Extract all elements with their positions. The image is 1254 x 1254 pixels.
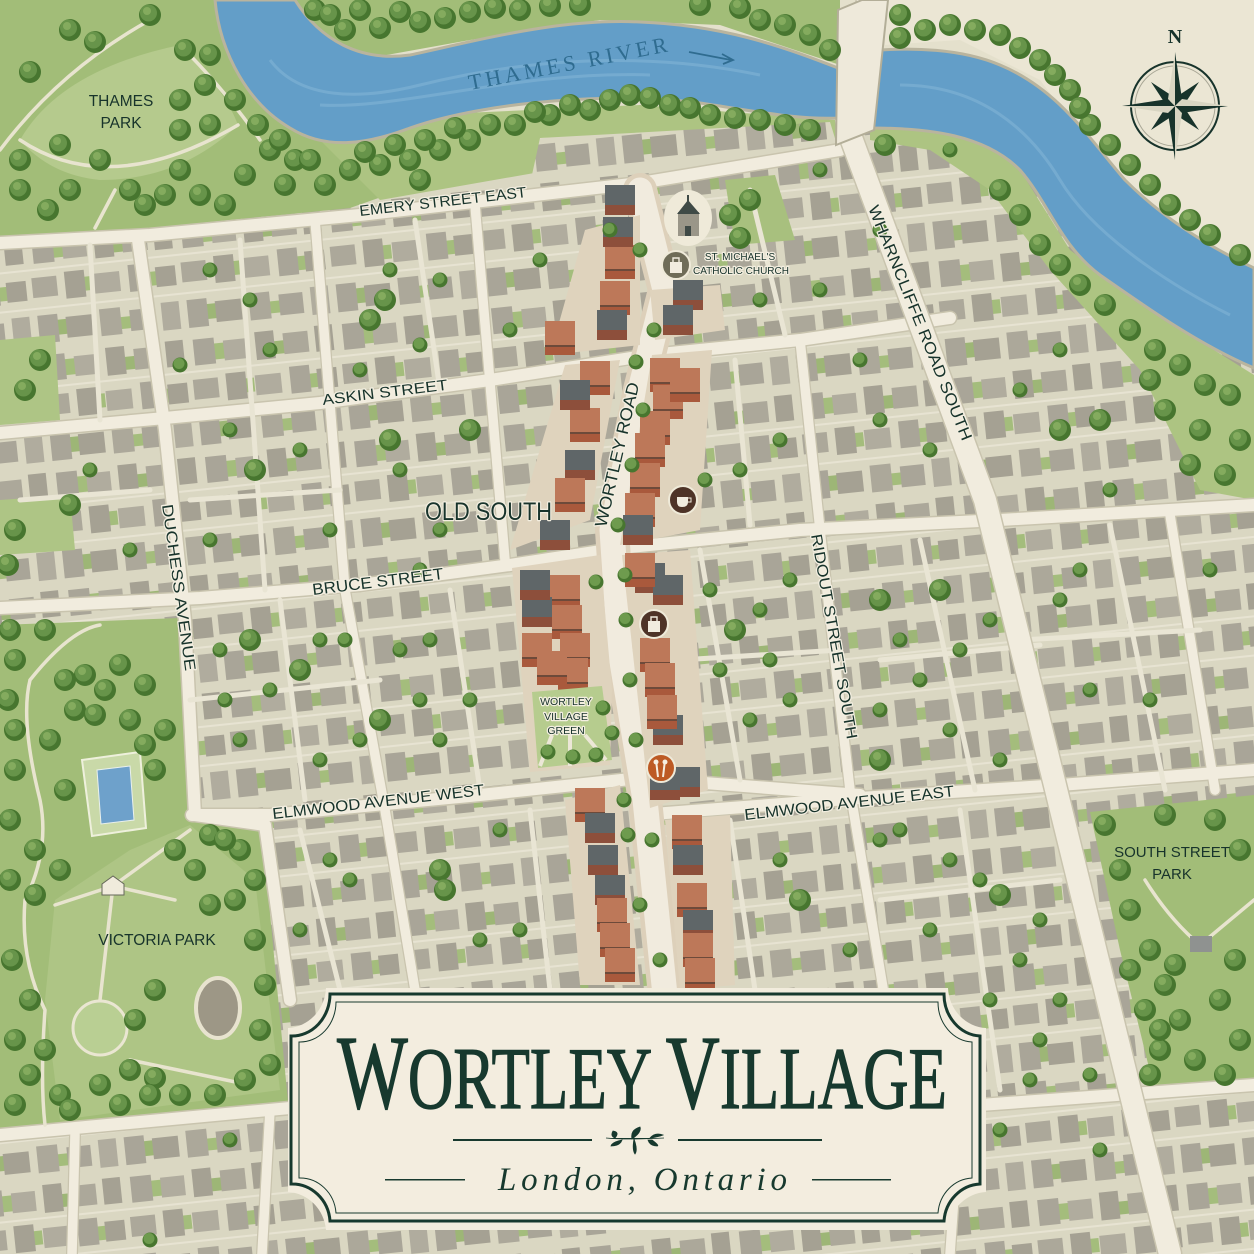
title plaque <box>288 988 986 1230</box>
label: Askin Street: ASKIN STREET <box>321 377 449 409</box>
tennis court <box>82 752 146 836</box>
park: upper bank of river <box>290 0 840 65</box>
Victoria Park lawn <box>45 825 280 1120</box>
green west lawns <box>0 335 75 555</box>
place labels <box>89 93 1230 949</box>
minor lanes <box>20 190 1200 1090</box>
road: Wharncliffe Road South <box>850 0 1170 1254</box>
label: Victoria Park: VICTORIA PARK <box>98 932 216 949</box>
icon: restaurant <box>647 754 675 782</box>
river: Thames <box>215 0 1254 368</box>
subtitle: London, Ontario <box>497 1162 787 1198</box>
label: Ridout Street South: RIDOUT STREET SOUTH <box>807 533 860 741</box>
arrow: river flow <box>689 52 733 64</box>
circular lawn <box>73 1001 127 1055</box>
label: Duchess Avenue: DUCHESS AVENUE <box>158 503 198 672</box>
label: Old South: OLD SOUTH <box>425 498 552 526</box>
label: Elmwood Avenue East: ELMWOOD AVENUE EAST <box>744 783 956 824</box>
road: Wharncliffe surface <box>850 0 1170 1254</box>
ornament: sprig <box>606 1127 664 1154</box>
compass diagonal points <box>1151 82 1199 130</box>
building: South Street Park pavilion <box>1190 936 1212 952</box>
label: Wortley Road: WORTLEY ROAD <box>591 380 643 529</box>
icon: coffee <box>669 486 697 514</box>
plaque inner border <box>299 1002 972 1213</box>
park: South Street Park <box>1090 795 1254 1092</box>
north bank green <box>300 105 838 200</box>
plaque outer border <box>291 994 980 1221</box>
label: Wortley Village Green: WORTLEY <box>540 696 592 708</box>
label: St. Michael's Catholic Church: CATHOLIC CHURCH <box>693 266 789 277</box>
park: Thames Park lawn <box>20 45 238 180</box>
label: Thames Park: THAMES <box>89 93 153 110</box>
river ripples <box>270 60 1230 315</box>
oval track <box>196 978 240 1038</box>
label: Wortley Village Green: GREEN <box>547 725 585 737</box>
houses north of Emery <box>530 122 838 184</box>
road: Wortley surface <box>612 190 665 995</box>
gazebo <box>102 876 124 895</box>
plaque backing <box>288 988 986 1230</box>
icon: shopping bag <box>640 610 668 638</box>
park: Thames Park grounds <box>0 0 430 238</box>
commercial buildings along Wortley Road <box>510 185 735 992</box>
river label: Thames River: THAMES RIVER <box>466 31 672 95</box>
icon: shop at church <box>662 251 690 279</box>
label: Wharncliffe Road South: WHARNCLIFFE ROAD SOUTH <box>864 203 974 443</box>
park: Victoria Park <box>0 618 288 1135</box>
label: Thames Park: PARK <box>100 115 142 132</box>
compass light points <box>1122 52 1228 160</box>
divider right <box>678 1139 822 1141</box>
bridge <box>836 0 888 145</box>
compass ring <box>1131 62 1219 150</box>
divider left <box>453 1139 592 1141</box>
label: Emery Street East: EMERY STREET EAST <box>359 184 527 220</box>
compass main points <box>1122 52 1228 160</box>
subtitle rule right <box>812 1179 891 1180</box>
compass north letter: N <box>1168 26 1183 48</box>
label: Elmwood Avenue West: ELMWOOD AVENUE WEST <box>272 782 486 823</box>
label: South Street Park: PARK <box>1152 866 1192 883</box>
title: WORTLEY VILLAGE <box>337 1014 947 1131</box>
label: Bruce Street: BRUCE STREET <box>311 566 445 599</box>
park: Wortley Village Green <box>532 686 620 768</box>
label: St. Michael's Catholic Church: ST. MICHAEL'S <box>705 252 775 263</box>
compass rose <box>1122 26 1228 160</box>
street labels <box>158 184 974 824</box>
green by church <box>725 175 795 245</box>
park: south river bank <box>870 125 1254 500</box>
subtitle rule left <box>385 1179 465 1180</box>
label: Wortley Village Green: VILLAGE <box>544 711 588 723</box>
block tints <box>510 215 735 990</box>
cream land top right <box>885 0 1254 290</box>
label: South Street Park: SOUTH STREET <box>1114 844 1230 861</box>
church: St. Michael's <box>664 190 712 246</box>
road: Wortley Road <box>612 190 665 995</box>
